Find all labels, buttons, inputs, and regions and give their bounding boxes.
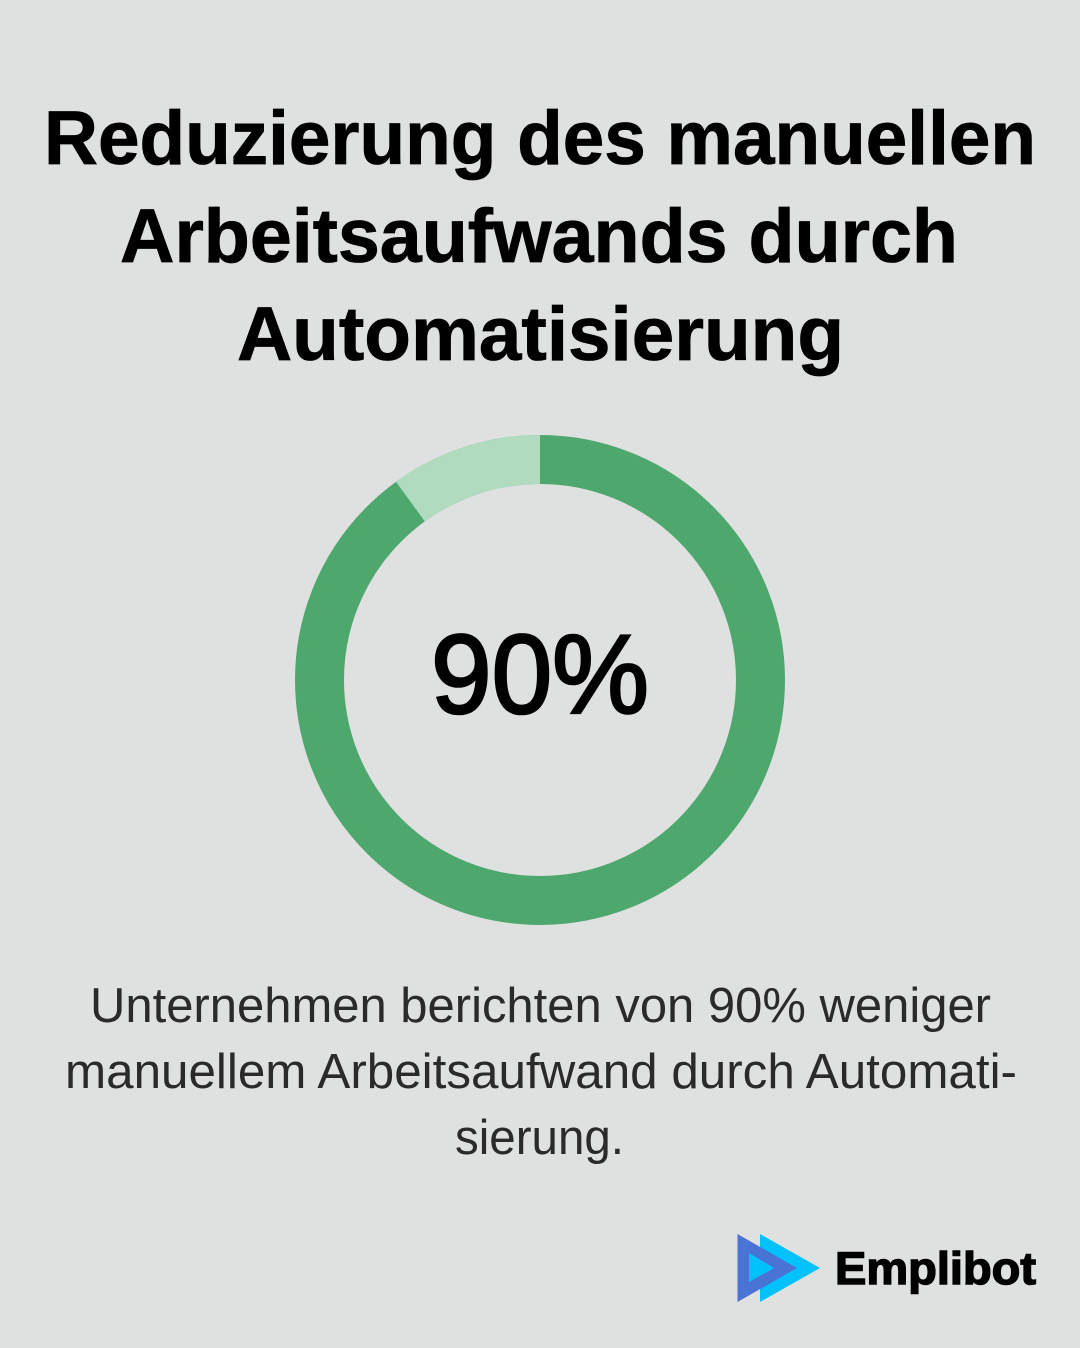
title: Reduzierung des manuellen: [44, 96, 1036, 181]
icon: play triangles: [738, 1234, 820, 1302]
description text: sierung.: [455, 1111, 624, 1165]
title: Arbeitsaufwands durch: [120, 194, 958, 279]
donut value: 90%: [431, 612, 649, 737]
logo wordmark: Emplibot: [835, 1243, 1036, 1294]
donut chart: 90%: [320, 459, 760, 900]
logo: Emplibot: [738, 1234, 1036, 1302]
title: [44, 96, 1036, 377]
description text: Unternehmen berichten von 90% weniger: [90, 979, 991, 1033]
title: Automatisierung: [237, 292, 844, 377]
description text: [65, 979, 1017, 1165]
description text: manuellem Arbeitsaufwand durch Automati-: [65, 1045, 1017, 1099]
